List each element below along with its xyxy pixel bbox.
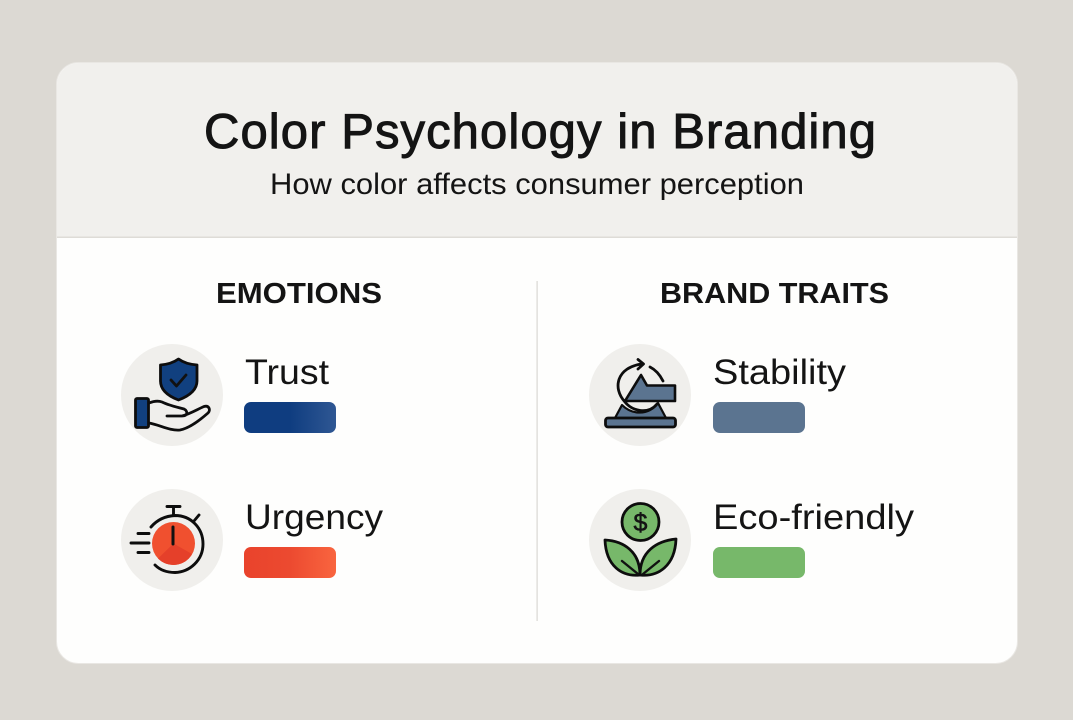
item: stability xyxy=(589,344,847,446)
label: urgency: Urgency xyxy=(245,498,384,537)
color bar: eco-friendly xyxy=(713,547,805,578)
color bar: urgency xyxy=(244,547,336,578)
item: eco-friendly xyxy=(589,489,915,591)
heading: emotions: EMOTIONS xyxy=(216,278,382,310)
icon: mountain with cycle arrow xyxy=(589,344,691,446)
color bar: stability xyxy=(713,402,805,433)
icon: coin and leaves xyxy=(589,489,691,591)
panel: header band xyxy=(57,63,1017,237)
title: Color Psychology in Branding xyxy=(204,105,876,159)
icon: stopwatch xyxy=(121,489,223,591)
icon glyph: dollar: $ xyxy=(634,509,648,537)
label: stability: Stability xyxy=(713,353,847,392)
panel: card xyxy=(56,62,1018,664)
label: eco-friendly: Eco-friendly xyxy=(713,498,915,537)
color bar: trust xyxy=(244,402,336,433)
item: urgency xyxy=(121,489,384,591)
label: trust: Trust xyxy=(245,353,329,392)
icon: shield in hand xyxy=(121,344,223,446)
subtitle: How color affects consumer perception xyxy=(270,168,804,201)
item: trust xyxy=(121,344,336,446)
heading: brand traits: BRAND TRAITS xyxy=(660,278,889,310)
